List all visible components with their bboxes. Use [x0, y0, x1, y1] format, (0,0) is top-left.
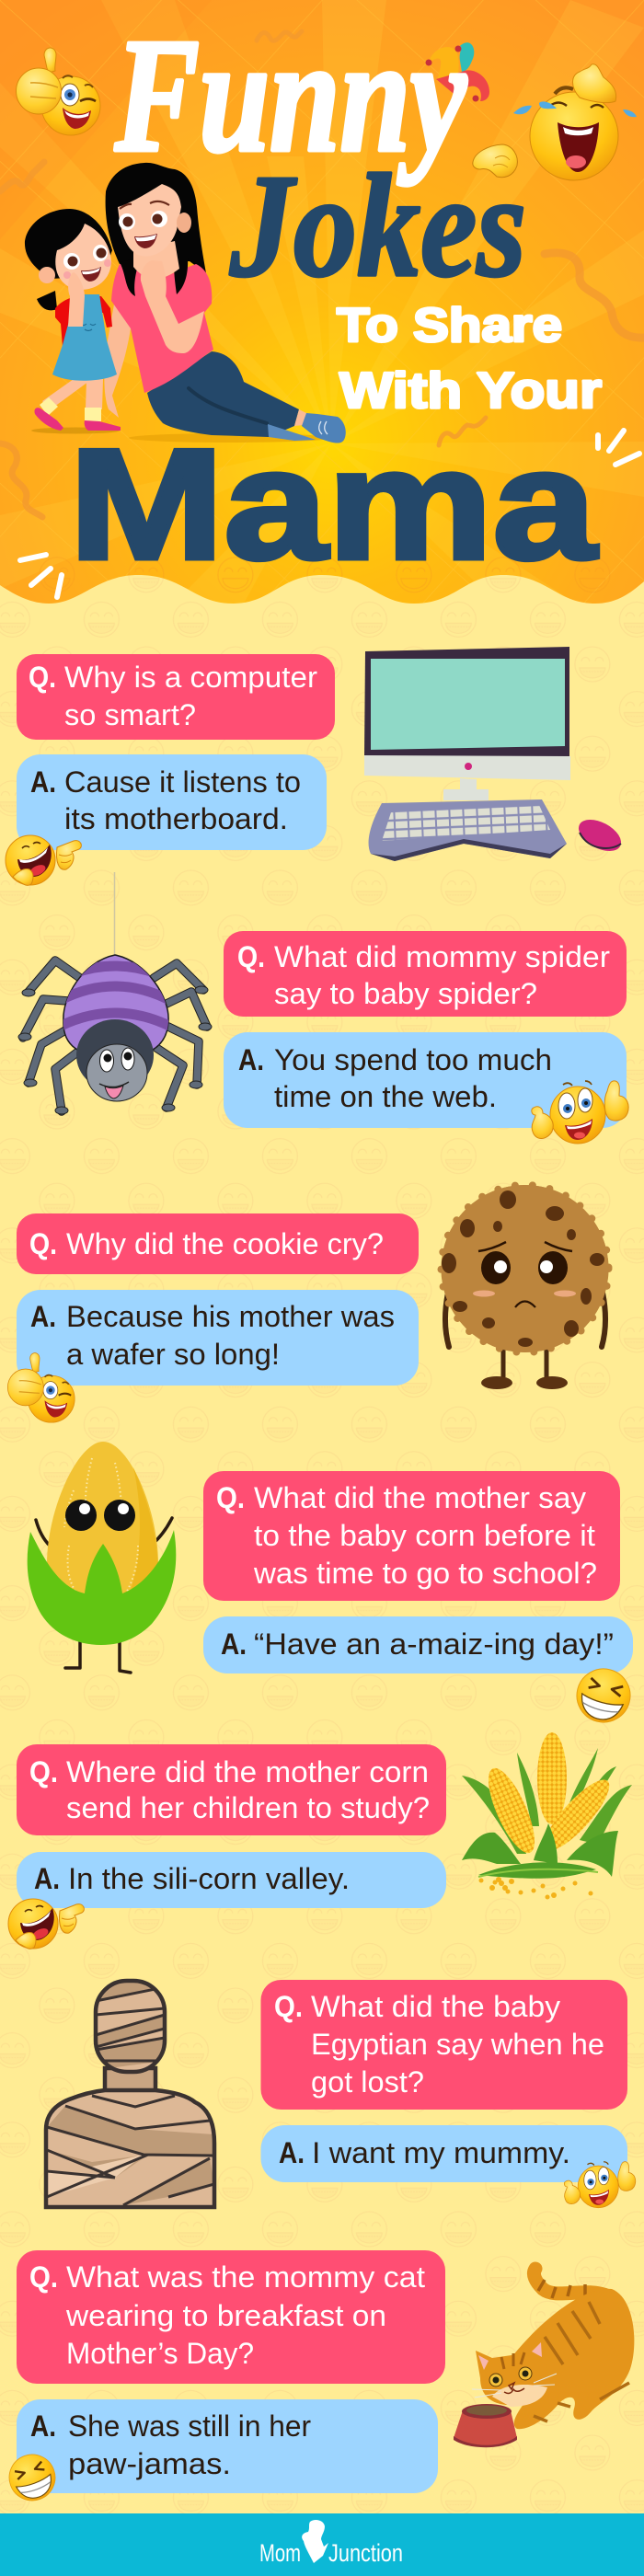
spider feet	[18, 986, 212, 1114]
question bubble 4: to the baby corn before it	[254, 1519, 595, 1552]
corn legs	[36, 1518, 172, 1673]
joke 1	[6, 647, 627, 885]
illustration: cat eating	[454, 2269, 634, 2447]
illustration: sad cookie	[442, 1185, 609, 1389]
answer bubble 2: You spend too much	[274, 1043, 552, 1076]
corn front leaves	[462, 1823, 618, 1879]
question bubble 6: Q.	[274, 1990, 303, 2023]
answer bubble 7: A.	[30, 2409, 56, 2443]
girl hand	[68, 272, 85, 327]
question bubble 6: What did the baby	[311, 1990, 560, 2023]
question bubble 2: Q.	[237, 940, 265, 973]
answer bubble 5: In the sili-corn valley.	[68, 1862, 350, 1895]
logo wordmark	[259, 2539, 403, 2567]
cookie limbs	[503, 1348, 546, 1377]
icon: winking thumbs-up emoji	[7, 1353, 75, 1422]
girl ponytail	[37, 291, 57, 310]
icon: two thumbs-up emoji	[564, 2162, 636, 2208]
corn kernel body	[47, 1442, 158, 1601]
answer bubble 6: I want my mummy.	[312, 2136, 570, 2169]
illustration: baby corn	[28, 1442, 176, 1673]
joke 3	[7, 1185, 608, 1422]
mummy body	[46, 2090, 214, 2207]
answer bubble 3: Because his mother was	[66, 1300, 395, 1333]
cookie body	[442, 1185, 609, 1352]
illustration: spider	[18, 872, 212, 1114]
answer bubble 1: Cause it listens to	[64, 765, 301, 799]
joke 2	[18, 872, 628, 1144]
answer bubble 2: time on the web.	[274, 1080, 497, 1113]
girl dress	[52, 294, 117, 381]
mother shirt	[111, 260, 213, 393]
answer bubble 3: a wafer so long!	[66, 1338, 280, 1371]
answer bubble 3	[17, 1290, 419, 1386]
icon: winking thumbs-up emoji	[17, 48, 100, 135]
girl red shirt	[55, 296, 112, 347]
cat food bowl	[454, 2410, 517, 2447]
corn eyes	[65, 1500, 97, 1531]
question bubble 4	[203, 1471, 620, 1601]
question bubble 2	[224, 931, 627, 1017]
mother legs	[147, 351, 299, 437]
question bubble 6: Egyptian say when he	[311, 2028, 604, 2061]
white sparks bottom left	[20, 555, 62, 597]
mother back hair	[106, 163, 206, 273]
spider head	[76, 1019, 154, 1091]
question bubble 3	[17, 1213, 419, 1274]
question bubble 3: Q.	[29, 1227, 57, 1260]
corn cobs	[537, 1732, 567, 1824]
question bubble 5: send her children to study?	[66, 1791, 430, 1824]
icon: pointing hand	[473, 144, 517, 178]
question bubble 4: was time to go to school?	[253, 1557, 597, 1590]
joke 5	[8, 1732, 632, 1949]
decorative streamers	[0, 31, 644, 517]
answer bubble 1: its motherboard.	[64, 802, 288, 835]
answer bubble 7: paw-jamas.	[68, 2447, 231, 2480]
joke 7	[3, 2250, 634, 2507]
cat head	[476, 2337, 546, 2405]
question bubble 6	[261, 1980, 627, 2110]
illustration: mummy	[46, 1981, 214, 2207]
question bubble 7: Mother’s Day?	[66, 2337, 254, 2370]
answer bubble 4: A.	[221, 1627, 247, 1661]
question bubble 5	[17, 1744, 446, 1835]
header banner	[0, 0, 644, 612]
icon: laughing emoji pointing	[8, 1899, 84, 1949]
answer bubble 7	[17, 2399, 438, 2493]
mother hair strands	[120, 258, 188, 296]
icon: two thumbs-up emoji	[532, 1081, 628, 1144]
illustration: computer	[364, 647, 627, 861]
title: Funny: Funny	[114, 6, 467, 186]
joke 6	[46, 1980, 636, 2208]
question bubble 2: say to baby spider?	[274, 977, 537, 1010]
answer bubble 3: A.	[30, 1300, 56, 1333]
mummy neck	[105, 2068, 155, 2096]
title: To Share: To Share	[337, 299, 562, 352]
white sparks top right	[598, 431, 639, 465]
icon: grinning squint emoji	[3, 2448, 62, 2507]
girl hair	[25, 209, 112, 279]
title: Jokes: Jokes	[229, 144, 526, 307]
logo mark	[302, 2520, 328, 2563]
question bubble 3: Why did the cookie cry?	[66, 1227, 384, 1260]
cookie chips	[442, 1190, 604, 1347]
question bubble 7	[17, 2250, 445, 2384]
answer bubble 2	[224, 1032, 627, 1128]
logo wordmark: Junction	[328, 2539, 403, 2567]
illustration: mother sitting	[104, 163, 346, 443]
sunburst rays	[0, 0, 644, 612]
answer bubble 2: A.	[238, 1043, 264, 1076]
cat tail	[534, 2269, 609, 2296]
girl face	[55, 224, 111, 290]
answer bubble 4: “Have an a-maiz-ing day!”	[254, 1627, 614, 1661]
answer bubble 1: A.	[30, 765, 56, 799]
icon: laughing emoji pointing	[6, 835, 81, 885]
joke 4	[28, 1442, 637, 1729]
mother back arm	[104, 299, 131, 418]
answer bubble 7: She was still in her	[68, 2409, 311, 2443]
spider legs	[23, 960, 207, 1111]
illustration: little girl	[25, 209, 121, 434]
girl legs and shoes	[42, 379, 103, 409]
cookie eyes	[481, 1251, 511, 1284]
icon: laughing crying emoji	[513, 64, 637, 180]
mummy head	[96, 1981, 165, 2072]
spider thread	[114, 872, 116, 955]
title: With Your: With Your	[339, 362, 602, 419]
cat body	[506, 2289, 634, 2429]
question bubble 7: Q.	[29, 2260, 58, 2294]
answer bubble 5	[17, 1852, 446, 1908]
mother face	[118, 184, 181, 257]
answer bubble 6	[261, 2125, 627, 2182]
question bubble 1: so smart?	[64, 698, 196, 731]
mother neck	[133, 241, 179, 279]
illustration: corn cobs	[462, 1732, 632, 1899]
answer bubble 5: A.	[34, 1862, 60, 1895]
question bubble 7: wearing to breakfast on	[65, 2299, 386, 2332]
corn back leaves	[462, 1748, 632, 1854]
question bubble 1: Q.	[29, 661, 56, 694]
footer bar	[0, 2513, 644, 2576]
question bubble 7: What was the mommy cat	[66, 2260, 425, 2294]
icon: jester hat	[425, 42, 489, 101]
icon: grinning squint emoji	[570, 1662, 637, 1729]
answer bubble 1	[17, 754, 327, 850]
logo wordmark: Mom	[259, 2539, 301, 2567]
spider body	[63, 955, 168, 1058]
question bubble 1	[17, 654, 335, 740]
cream page background with smiley pattern	[0, 575, 644, 2513]
question bubble 1: Why is a computer	[64, 661, 317, 694]
question bubble 4: What did the mother say	[254, 1481, 586, 1514]
corn husk	[28, 1530, 176, 1645]
loose corn kernels	[478, 1877, 592, 1899]
question bubble 6: got lost?	[311, 2065, 424, 2099]
mother shoes	[268, 424, 316, 441]
answer bubble 6: A.	[279, 2136, 305, 2169]
question bubble 5: Where did the mother corn	[66, 1755, 429, 1788]
question bubble 5: Q.	[29, 1755, 58, 1788]
answer bubble 4	[203, 1616, 633, 1673]
question bubble 4: Q.	[216, 1481, 245, 1514]
question bubble 2: What did mommy spider	[274, 940, 610, 973]
title: Mama: Mama	[69, 417, 598, 592]
mother raised arm	[141, 260, 204, 353]
